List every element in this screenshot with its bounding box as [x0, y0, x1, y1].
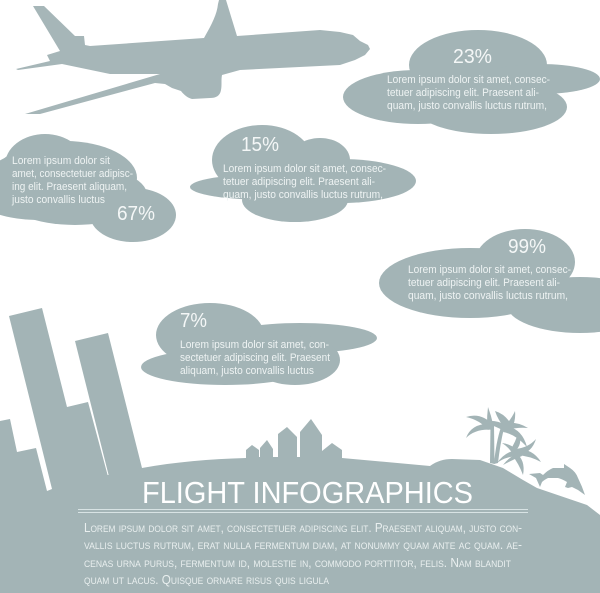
body text: quam ut lacus. Quisque ornare risus quis ligula: [84, 573, 329, 587]
cloud text: justo convallis luctus: [11, 194, 105, 206]
icon: dolphin: [529, 464, 585, 495]
cloud text: amet, consectetuer adipisc-: [12, 168, 133, 180]
panel: cloud 99%: [379, 229, 600, 333]
percentage: 23%: [453, 46, 492, 68]
body text: Lorem ipsum dolor sit amet, consectetuer adipiscing elit. Praesent aliquam, justo con-: [84, 521, 522, 535]
cloud text: aliquam, justo convallis luctus: [180, 365, 314, 377]
cloud text: ing elit. Praesent aliquam,: [12, 181, 127, 193]
cloud text: Lorem ipsum dolor sit amet, consec-: [223, 163, 386, 175]
body text: cenas urna purus, fermentum id, molestie in, commodo porttitor, felis. Nam blandit: [84, 556, 511, 570]
cloud text: quam, justo convallis luctus rutrum,: [387, 100, 547, 112]
body text: vallis luctus rutrum, erat nulla fermentum diam, at nonummy quam ante ac quam. ae-: [84, 538, 522, 552]
cloud text: tetuer adipiscing elit. Praesent ali-: [387, 87, 539, 99]
cloud text: [180, 339, 330, 377]
cloud text: Lorem ipsum dolor sit: [12, 155, 110, 167]
cloud text: tetuer adipiscing elit. Praesent ali-: [223, 176, 375, 188]
title double rule: [78, 510, 528, 512]
cloud shape: [0, 134, 176, 242]
cloud text: Lorem ipsum dolor sit amet, consec-: [387, 74, 550, 86]
landscape: skyscrapers, houses and island ground: [0, 308, 600, 593]
panel: cloud 15%: [190, 125, 416, 222]
cloud text: quam, justo convallis luctus rutrum,: [223, 189, 383, 201]
cloud text: quam, justo convallis luctus rutrum,: [408, 290, 568, 302]
icon: airplane silhouette: [16, 0, 370, 114]
percentage: 15%: [241, 134, 279, 156]
panel: cloud 7%: [141, 303, 377, 385]
cloud text: [387, 74, 550, 112]
panel: cloud 67%: [0, 134, 176, 242]
percentage: 67%: [117, 203, 155, 225]
cloud shape: [379, 229, 600, 333]
cloud shape: [190, 125, 416, 222]
cloud text: [11, 155, 133, 206]
cloud text: sectetuer adipiscing elit. Praesent: [180, 352, 330, 364]
cloud text: [223, 163, 386, 201]
panel: cloud 23%: [343, 30, 600, 134]
title: FLIGHT INFOGRAPHICS: [142, 475, 473, 510]
body text: [84, 521, 522, 587]
cloud text: Lorem ipsum dolor sit amet, con-: [180, 339, 329, 351]
cloud shape: [141, 303, 377, 385]
percentage: 7%: [180, 310, 207, 332]
cloud text: Lorem ipsum dolor sit amet, consec-: [408, 264, 571, 276]
cloud text: tetuer adipiscing elit. Praesent ali-: [408, 277, 560, 289]
percentage: 99%: [508, 236, 546, 258]
cloud shape: [343, 30, 600, 134]
cloud text: [408, 264, 571, 302]
icon: palm trees: [466, 407, 541, 475]
